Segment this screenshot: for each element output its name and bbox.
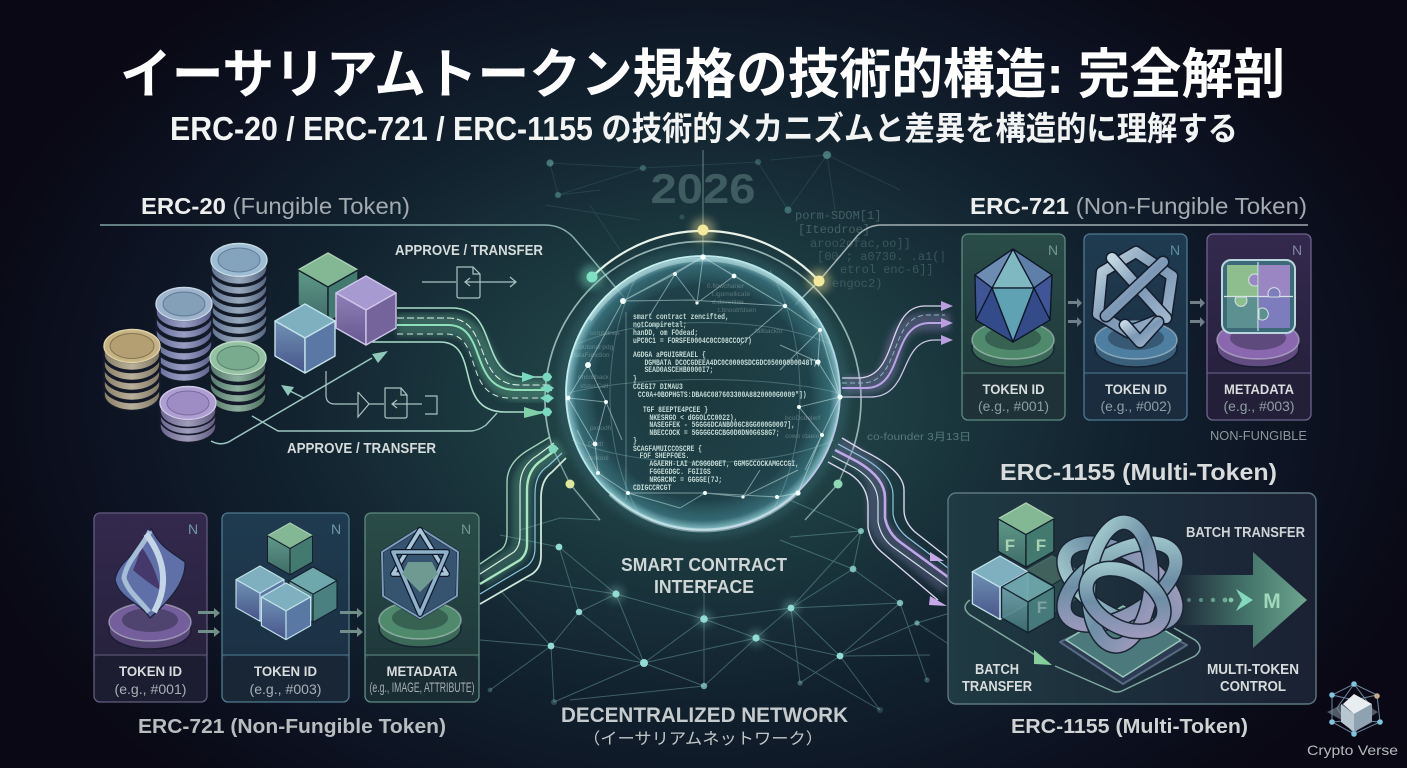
label: batch transfer left: BATCH: [975, 662, 1019, 678]
arrow: batch transfer shaft: [1177, 552, 1307, 648]
label: approve transfer top: APPROVE / TRANSFER: [395, 243, 543, 259]
logo: Crypto Verse: [1307, 681, 1398, 758]
subtitle: ERC-20 / ERC-721 / ERC-1155 の技術的メカニズムと差異を構造的に理解する: [170, 110, 1238, 147]
sphere top highlight: [590, 259, 816, 320]
platform: [1060, 606, 1187, 684]
card: token id 001: [962, 234, 1065, 420]
data pipe: contract to lower ERC-721: [480, 437, 566, 604]
solidity code: CCEGI7 DIMAU3: [633, 384, 683, 392]
card: token id 003: [222, 513, 349, 702]
faint side text: dataFunction: [572, 352, 610, 359]
label: batch transfer left: [962, 662, 1032, 695]
solidity code: NRGRCNC = GGGGE(7J;: [649, 477, 722, 485]
loop arrowhead: [1034, 650, 1052, 665]
ring nodes: [548, 218, 842, 488]
card: token id 001: TOKEN ID: [119, 663, 182, 679]
icon: angular knot: [1098, 252, 1172, 342]
network: decentralized network mesh: [480, 500, 960, 713]
card: token id 001: N: [1048, 242, 1058, 258]
card: metadata: (e.g., IMAGE, ATTRIBUTE): [370, 679, 474, 695]
icon: crystal node cube: [1327, 681, 1383, 737]
label: smart contract interface: SMART CONTRACT: [621, 555, 787, 575]
solidity code: NKESRGO < dGGOLCC0022),: [649, 415, 738, 423]
arrows between cards: [1068, 298, 1205, 327]
background code text: top right: etrol enc-6]]: [840, 263, 934, 277]
faint side text: coutonol pdg: [576, 344, 614, 351]
arrows into sphere: [522, 372, 554, 418]
title: イーサリアムトークン規格の技術的構造: 完全解剖: [120, 45, 1285, 105]
solidity code: DGMBATA DCOCGDEEA4DC0C0000SDCGDC05000000048T);: [644, 360, 821, 368]
solidity code: }: [633, 438, 637, 446]
panel: ERC-20 illustration: [104, 244, 396, 442]
solidity code: CDIGCCRCGT: [633, 485, 672, 493]
sphere lower highlight: [610, 494, 796, 530]
faint side text: pxoodh: [590, 425, 612, 432]
card: metadata: [365, 513, 479, 702]
card: metadata 003: [1207, 234, 1311, 420]
label: multi-token control: MULTI-TOKEN: [1207, 662, 1299, 678]
smart contract sphere: [557, 247, 849, 539]
solidity code: TGF 8EEPTE4PCEE }: [643, 407, 708, 415]
faint side text: [572, 283, 820, 462]
card: token id 001: (e.g., #001): [978, 398, 1049, 414]
label: smart contract interface: INTERFACE: [654, 577, 754, 597]
faint side text: bcoDodelerf: [785, 415, 820, 422]
sphere wire mesh: [568, 257, 840, 515]
card: metadata 003: (e.g., #003): [1224, 398, 1294, 414]
coin stack: tall blue: [211, 244, 267, 344]
network nodes: [488, 528, 930, 713]
token cubes: [298, 253, 358, 322]
icon: multi-token knot: [1051, 520, 1189, 648]
heading: ERC-1155 top: ERC-1155 (Multi-Token): [1000, 459, 1277, 485]
card: token id 002: (e.g., #002): [1100, 398, 1172, 414]
icon: cube cluster: [236, 523, 337, 640]
icon: document with transfer arrows: [422, 267, 516, 298]
solidity code: FOF SHEPFOES.: [640, 453, 689, 461]
outer ring: [545, 150, 861, 520]
watermark note: co-founder 3月13日: [867, 431, 971, 443]
route line to label: [252, 413, 497, 431]
label: multi-token control: CONTROL: [1220, 679, 1286, 695]
heading: ERC-1155 bottom: ERC-1155 (Multi-Token): [1011, 716, 1248, 738]
label: decentralized network: DECENTRALIZED NETWORK: [561, 704, 848, 727]
panel: ERC-721 top cards: [962, 234, 1311, 420]
panel: ERC-721 lower cards: [94, 513, 479, 702]
heading: ERC-721 bottom: ERC-721 (Non-Fungible Token): [138, 716, 446, 738]
heading: ERC-721 top: ERC-721 (Non-Fungible Token): [970, 193, 1307, 219]
data pipe: contract to ERC-1155: [828, 438, 948, 600]
icon: wire icosahedron: [382, 528, 458, 618]
coin stack: purple: [160, 386, 216, 442]
faint side text: fallbackto: [755, 328, 783, 335]
icon: twisted ribbon: [115, 528, 185, 618]
card: token id 003: (e.g., #003): [250, 681, 322, 697]
faint side text: d.dovetitoe: [712, 299, 744, 306]
header rule: ERC-721 connector: [795, 225, 1308, 305]
cubes with F labels: F: [1036, 536, 1046, 555]
faint side text: teskool: [588, 455, 609, 462]
faint side text: Dfatlt: [588, 441, 603, 448]
solidity code: [633, 314, 821, 493]
label: batch transfer left: TRANSFER: [962, 679, 1032, 695]
icon: transfer document lower: [326, 371, 437, 418]
panel: ERC-1155: [948, 493, 1316, 704]
background code text: top right: [795, 209, 947, 291]
faint side text: 0.flowchaner: [707, 283, 745, 290]
label: decentralized network: [561, 704, 848, 748]
arrows into ERC-1155: [929, 552, 947, 606]
faint side text: ccrutolnes: [590, 330, 620, 337]
solidity code: smart contract zencifted,: [633, 314, 729, 322]
data pipe: contract to ERC-721: [842, 306, 950, 397]
label: multi-token control: [1207, 662, 1299, 695]
faint side text: ststecCall: [580, 383, 609, 390]
solidity code: NASEGFEK - 5GGG6DCANB006C8GG000G0007],: [649, 422, 795, 430]
label: approve transfer bottom: APPROVE / TRANSFER: [287, 441, 436, 457]
card: token id 003: N: [331, 521, 341, 537]
background code text: top right: engoc2): [832, 277, 882, 291]
solidity code: hanDD, om FOdead;: [633, 330, 698, 338]
cubes with F labels: F: [1005, 536, 1015, 555]
logo: Crypto Verse: Crypto Verse: [1307, 742, 1398, 758]
solidity code: AGDGA aPGUIGREAEL {: [633, 352, 706, 360]
faint side text: t.bnootrfdsen: [718, 307, 756, 314]
cubes with F labels: [972, 503, 1078, 633]
solidity code: NBECCOCK = 5GGGGCGCBG0D0DN0G6S8G7;: [649, 430, 780, 438]
card: token id 002: N: [1170, 242, 1180, 258]
card: token id 003: TOKEN ID: [254, 663, 317, 679]
loop line: [965, 600, 1200, 692]
coin stack: tan: [104, 330, 160, 410]
header rule: ERC-20 connector: [100, 225, 627, 301]
solidity code: AGAERH-LAI ACGGGDGET, GGMGCCOCKAMGCCGI,: [649, 461, 799, 469]
label: M: M: [1263, 590, 1281, 613]
solidity code: notCompiretal;: [633, 322, 687, 330]
icon: crystal: [975, 249, 1052, 342]
card: token id 001: N: [188, 521, 198, 537]
sphere mesh nodes: [566, 254, 843, 499]
background code text: top right: [Iteodroe]: [798, 223, 870, 237]
solidity code: FGGEGDGC. FGIIGS: [649, 469, 711, 477]
icon: puzzle: [1222, 260, 1295, 333]
card: token id 001: (e.g., #001): [114, 681, 186, 697]
coin stack: periwinkle: [156, 288, 212, 382]
background code text: top right: aroo2ofac,oo]]: [810, 237, 911, 251]
card: token id 001: [94, 513, 207, 702]
solidity code: }: [633, 376, 637, 384]
solidity code: uPC0C1 = FORSFE0004C0CC08CCOC7): [633, 338, 752, 346]
year watermark: 2026: [650, 165, 756, 212]
card: token id 002: [1084, 234, 1187, 420]
solidity code: SCAGFAMUICCOSCRE {: [633, 446, 702, 454]
card: metadata: N: [461, 521, 471, 537]
background code text: top right: [00 ; a0730. .a1(|: [817, 250, 947, 264]
faint side text: oncollback: [578, 374, 609, 381]
arrow: rising approve route: [211, 351, 388, 444]
card: metadata 003: METADATA: [1224, 382, 1294, 397]
cubes with F labels: F: [1037, 598, 1047, 617]
dotted flow to M: [1187, 589, 1253, 611]
faint side text: cowo ctaeio: [785, 433, 820, 440]
label: batch transfer right: BATCH TRANSFER: [1186, 525, 1305, 541]
solidity code: CC0A+0BOPHGTS:DBA6C087603300A8820000G0009"]): [638, 392, 807, 400]
label: non-fungible: NON-FUNGIBLE: [1210, 429, 1307, 443]
card: metadata 003: N: [1292, 242, 1302, 258]
card: token id 002: TOKEN ID: [1105, 382, 1167, 397]
faint side text: t.igomellicate: [712, 291, 750, 298]
card: token id 001: TOKEN ID: [982, 382, 1045, 397]
code margin rule: [625, 312, 627, 500]
background code text: top right: porm-SDOM[1]: [795, 209, 881, 223]
label: decentralized network: （イーサリアムネットワーク）: [583, 730, 823, 748]
arrows between cards: [198, 608, 363, 637]
solidity code: SEAD0ASCEHB0000I7;: [644, 367, 713, 375]
coin stack: green: [210, 342, 266, 412]
label: smart contract interface: [621, 555, 787, 597]
data pipe: ERC-20 to contract: [372, 308, 552, 412]
card: metadata: METADATA: [386, 663, 458, 679]
background network: top: [545, 151, 900, 250]
heading: ERC-20: ERC-20 (Fungible Token): [141, 193, 410, 219]
arrows into ERC-721: [941, 301, 953, 345]
